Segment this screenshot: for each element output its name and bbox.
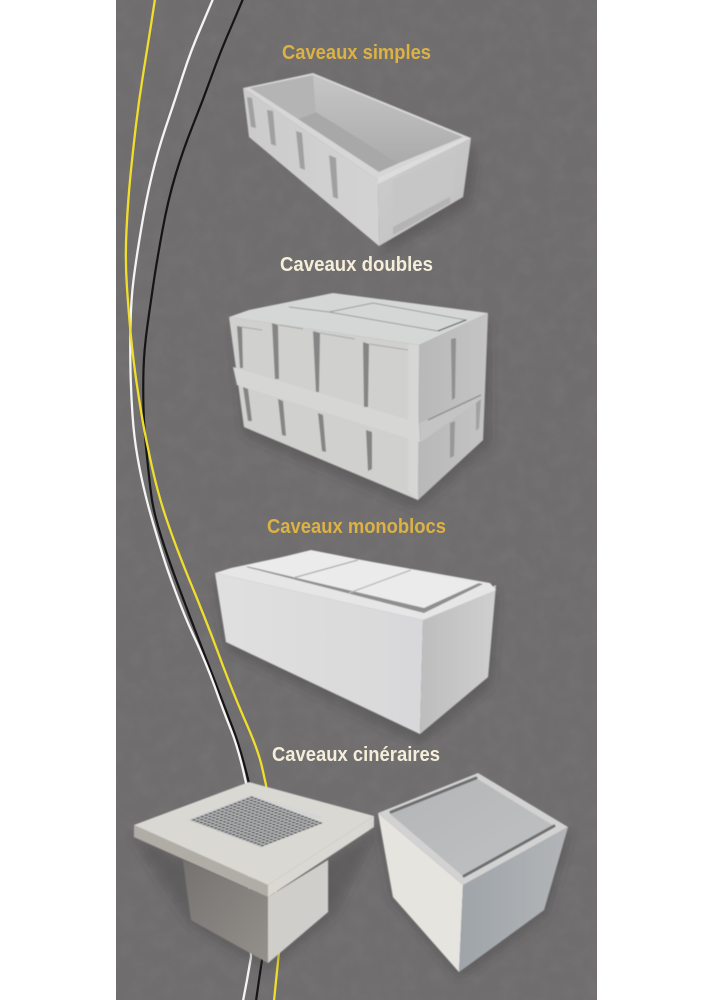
end face: [378, 138, 471, 246]
lower ribs: [243, 387, 252, 421]
plate edge left: [134, 825, 268, 897]
heading: Caveaux simples: Caveaux simples: [282, 42, 431, 64]
base right face: [268, 860, 328, 963]
upper ribs: [237, 326, 243, 368]
plate edge right: [268, 816, 374, 897]
product: monobloc vault: [214, 550, 498, 745]
product: double vault: [229, 293, 490, 510]
right face: [418, 313, 488, 500]
side ribs: [247, 97, 256, 128]
right face: [420, 585, 496, 734]
left face: [378, 813, 463, 972]
plate top: [134, 782, 374, 885]
top rim: [243, 73, 471, 180]
metal grating: [187, 795, 323, 848]
lid seams: [289, 303, 466, 331]
product: cinerary vault with grating: [130, 782, 378, 970]
corner pilaster: [408, 344, 419, 500]
interior short wall: [250, 75, 316, 119]
lid: [389, 778, 554, 877]
top rim: [215, 551, 496, 620]
gray background panel: [116, 0, 597, 1000]
horizontal band: [233, 367, 420, 442]
front face: [229, 317, 419, 500]
interior floor: [298, 112, 399, 172]
heading: Caveaux cinéraires: Caveaux cinéraires: [272, 744, 440, 766]
lid groove: [246, 551, 483, 613]
top face: [229, 293, 488, 345]
lid groove: [391, 778, 554, 876]
heading: Caveaux monoblocs: Caveaux monoblocs: [267, 516, 446, 538]
right face: [459, 827, 568, 972]
right side ribs: [451, 338, 456, 400]
interior back wall: [313, 75, 463, 163]
front face: [215, 573, 423, 734]
heading: Caveaux doubles: Caveaux doubles: [280, 254, 433, 276]
product: simple vault: [243, 73, 478, 254]
long side face: [243, 88, 379, 246]
product: cinerary vault with lid: [376, 773, 572, 980]
lid slabs: [246, 550, 479, 608]
decorative curved lines: yellow, white and black: [126, 0, 280, 1000]
top rim: [378, 773, 568, 885]
panel top edges: [242, 325, 408, 350]
base left face: [183, 860, 268, 963]
